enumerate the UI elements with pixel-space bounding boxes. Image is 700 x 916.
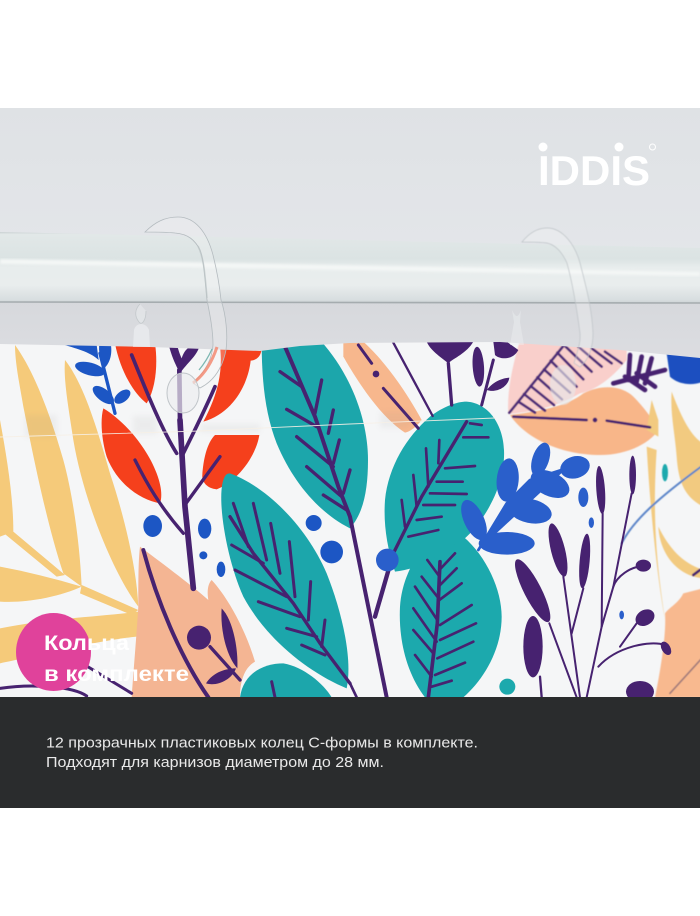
red leaves [102,343,262,503]
ring left [133,217,227,413]
purple leaves [427,342,673,702]
purple stems top [350,343,665,697]
pink badge circle [16,613,91,691]
shaded band under rod [0,298,700,358]
yellow fronds [0,345,141,663]
dark caption panel [0,697,700,808]
ring right [510,228,593,405]
peach leaf top left [343,342,422,433]
blurred right side pieces [508,340,700,697]
pattern: left half [0,340,387,697]
teal dot [499,679,515,695]
hatch lines [509,346,622,413]
badge text: в комплекте [44,662,189,686]
photo: curtain on rod [0,108,700,702]
peach leaf [132,547,255,697]
curtain stitch line [0,418,495,437]
caption text: Подходят для карнизов диаметром до 28 мм. [46,754,384,771]
caption text: 12 прозрачных пластиковых колец С-формы в комплекте. [46,734,478,752]
curtain fabric [0,335,700,697]
blue sprig right [376,440,624,619]
logo IDDIS: IDDIS [538,147,650,194]
curtain crease shadows [28,414,408,434]
blue dots [143,515,343,577]
wall [0,108,700,248]
teal leaves [221,340,368,697]
badge text: Кольца [44,631,130,655]
teal leaves [385,402,504,572]
purple stems and veins [0,343,387,697]
blue sprig [62,343,133,413]
curtain rod [0,232,700,303]
pattern: right half [343,340,700,702]
